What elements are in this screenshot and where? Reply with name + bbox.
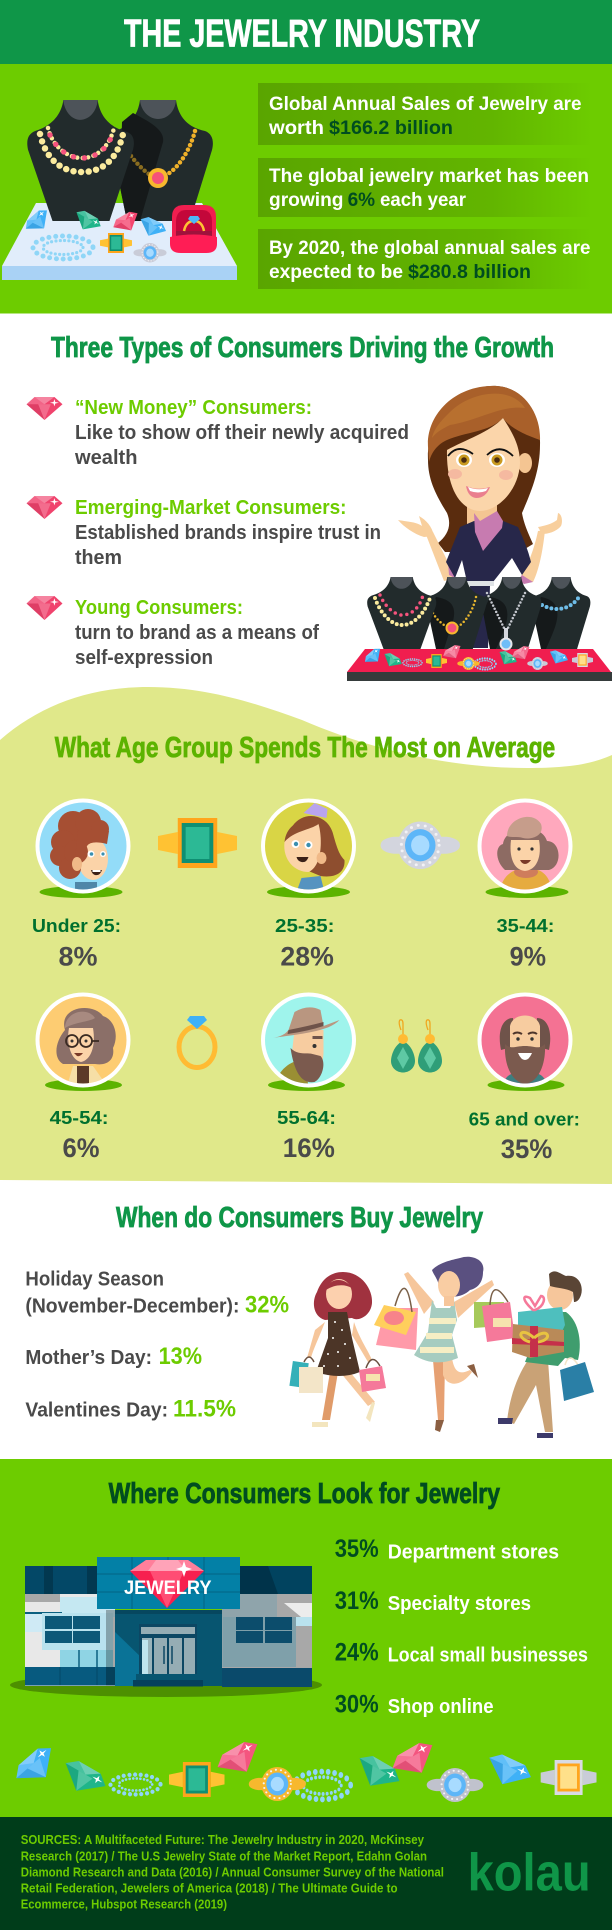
value: 28% (280, 942, 334, 972)
list: department stores: Department stores (388, 1541, 559, 1563)
illustration: jewelry store (10, 1557, 322, 1697)
silver ring (133, 243, 167, 262)
list: local small businesses: Local small businesses (388, 1644, 588, 1666)
stat box: 2020 forecast: expected to be (269, 261, 403, 283)
consumer type: new money: “New Money” Consumers: (75, 397, 312, 419)
age group: 45-54 (36, 992, 130, 1163)
sources: SOURCES: A Multifaceted Future: The Jewelry Industry in 2020, McKinsey (21, 1833, 424, 1847)
list: local small businesses: 24% (335, 1639, 379, 1667)
consumer type: young: turn to brand as a means of (75, 622, 319, 644)
consumer type: young: Young Consumers: (75, 597, 243, 619)
stat: mothers day: 13% (159, 1343, 202, 1370)
table jewelry (363, 643, 593, 671)
consumer type: new money (26, 397, 409, 469)
stat: holiday season: Holiday Season (25, 1269, 164, 1291)
sources: Ecommerce, Hubspot Research (2019) (21, 1898, 227, 1912)
gift bag (560, 1358, 594, 1401)
portrait: young woman (261, 798, 356, 894)
list: department stores: 35% (335, 1535, 379, 1563)
shopper: girl in dotted dress (289, 1272, 386, 1427)
icon: diamond (26, 397, 62, 420)
pearl necklaces (40, 128, 123, 172)
value: 16% (283, 1133, 335, 1163)
consumer type: emerging market (26, 496, 381, 569)
shopping bags (374, 1288, 515, 1350)
shopper: jumping woman (374, 1257, 515, 1432)
list: specialty stores: 31% (335, 1587, 379, 1615)
age group: 25-35 (261, 798, 356, 972)
left wing (25, 1566, 115, 1686)
shopper: man with gifts (498, 1271, 594, 1438)
stat box: market growth: The global jewelry market has been (269, 165, 589, 187)
list: department stores (335, 1535, 559, 1563)
bracelet (33, 236, 93, 259)
consumer type: emerging market: them (75, 547, 122, 569)
portrait: bald bearded man (478, 992, 572, 1088)
sources: Retail Federation, Jewelers of America (2018) / The Ultimate Guide to (21, 1882, 398, 1896)
stat: mothers day: Mother’s Day: (25, 1347, 152, 1369)
panel: global sales (0, 64, 612, 314)
label: 45-54: (50, 1107, 109, 1128)
stat box: annual sales: worth (268, 117, 324, 139)
icon: emerald earrings (391, 1020, 442, 1072)
stat box: 2020 forecast: $280.8 billion (408, 261, 531, 283)
entrance (115, 1610, 222, 1686)
stat: valentines day (25, 1396, 236, 1423)
red ring box (170, 205, 217, 253)
store name: JEWELRY (124, 1578, 212, 1599)
stat: valentines day: 11.5% (173, 1396, 236, 1423)
footer band (0, 1817, 612, 1930)
stat: holiday season: (November-December): (25, 1296, 239, 1318)
stat box: annual sales (258, 83, 592, 145)
saleswoman (398, 386, 562, 648)
stat: holiday season: 32% (245, 1292, 289, 1319)
stat box: market growth: each year (380, 189, 466, 211)
value: 8% (58, 942, 98, 972)
header band (0, 0, 612, 64)
age group: under 25 (32, 798, 130, 972)
illustration: shoppers (289, 1257, 594, 1438)
back bust (118, 100, 213, 221)
panel: where consumers look (0, 1459, 612, 1817)
icon: diamond (26, 596, 62, 620)
list: local small businesses (335, 1639, 588, 1667)
consumer type: young (26, 596, 319, 669)
heading: Where Consumers Look for Jewelry (109, 1478, 500, 1510)
list: shop online: 30% (335, 1691, 379, 1719)
jewelry row (11, 1737, 597, 1802)
age group: 35-44 (478, 798, 572, 972)
age group: 55-64 (261, 992, 356, 1163)
front bust (27, 100, 134, 221)
list: specialty stores (335, 1587, 531, 1615)
icon: emerald ring (158, 818, 237, 868)
stat box: annual sales: $166.2 billion (329, 117, 453, 139)
platform (2, 203, 237, 280)
stat box: market growth: 6% (348, 189, 375, 211)
label: 65 and over: (469, 1108, 580, 1130)
icon: diamond (26, 496, 62, 519)
label: Under 25: (32, 915, 121, 936)
consumer type: emerging market: Emerging-Market Consumers: (75, 497, 346, 519)
bust display 2 (427, 577, 486, 649)
stat: mothers day (25, 1343, 202, 1370)
portrait: middle-aged woman (478, 798, 572, 894)
value: 9% (510, 942, 546, 972)
list: specialty stores: Specialty stores (388, 1593, 531, 1615)
value: 6% (62, 1133, 100, 1163)
illustration: saleswoman with jewelry table (347, 386, 612, 681)
stat: holiday season (25, 1269, 289, 1319)
consumer type: new money: wealth (74, 447, 138, 469)
gems on platform (22, 206, 168, 242)
emerald ring (100, 233, 132, 253)
panel: age groups background (0, 687, 612, 1184)
illustration: necklace display (2, 100, 237, 280)
sign board (97, 1557, 240, 1609)
icon: gold diamond ring (179, 1016, 215, 1068)
consumer type: emerging market: Established brands inspire trust in (75, 522, 381, 544)
stat box: market growth: growing (269, 189, 344, 211)
stat box: market growth (258, 158, 592, 217)
portrait: woman with glasses (36, 992, 130, 1088)
stat: valentines day: Valentines Day: (25, 1400, 168, 1422)
sources (21, 1833, 444, 1912)
icon: sign diamond (130, 1560, 204, 1608)
stat box: 2020 forecast (258, 229, 592, 289)
consumer type: young: self-expression (75, 647, 213, 669)
label: 35-44: (496, 915, 554, 936)
bust display 1 (367, 577, 436, 649)
list: shop online: Shop online (388, 1696, 494, 1718)
stat box: 2020 forecast: By 2020, the global annual sales are (269, 237, 591, 259)
heading: when consumers buy: When do Consumers Buy Jewelry (116, 1202, 483, 1234)
sources: Diamond Research and Data (2016) / Annual Consumer Survey of the National (21, 1866, 444, 1880)
title: THE JEWELRY INDUSTRY (124, 12, 480, 56)
icon: blue ring (381, 822, 460, 869)
right wing (222, 1566, 312, 1687)
list: shop online (335, 1691, 494, 1719)
bust display 4 (532, 577, 590, 649)
label: 25-35: (275, 915, 334, 936)
label: 55-64: (277, 1107, 336, 1128)
gold necklace (131, 131, 195, 188)
logo: kolau (468, 1844, 591, 1902)
stat box: annual sales: Global Annual Sales of Jewelry are (269, 93, 582, 115)
consumer type: new money: Like to show off their newly acquired (75, 422, 409, 444)
portrait: man with hat (261, 992, 356, 1088)
sources: Research (2017) / The U.S Jewelry State of the Market Report, Edahn Golan (21, 1850, 427, 1864)
table (347, 649, 612, 681)
value: 35% (501, 1134, 552, 1164)
bust display 3 (482, 577, 541, 650)
shopping bags (289, 1357, 386, 1393)
age group: 65 and over (469, 992, 580, 1164)
portrait: boy (36, 798, 130, 896)
